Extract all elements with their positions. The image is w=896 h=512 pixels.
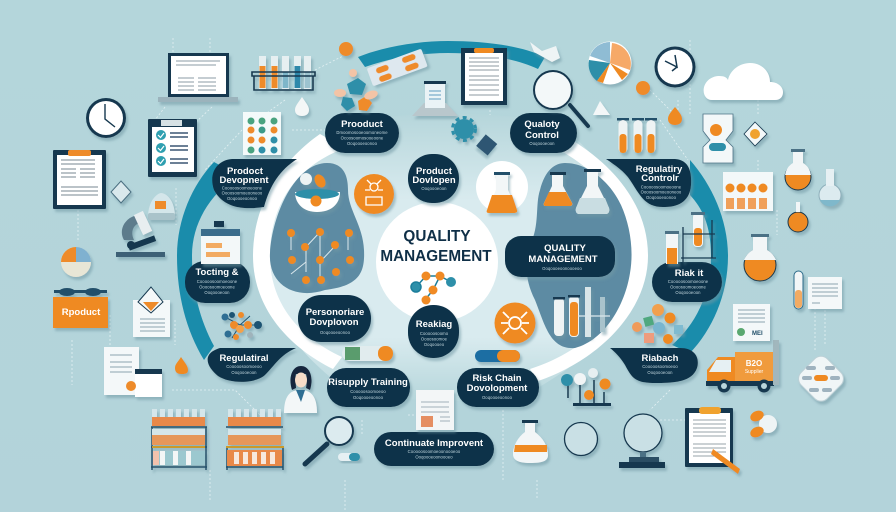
icon: document clipboard bbox=[53, 150, 106, 209]
pill: quality management: QUALITY bbox=[544, 243, 587, 254]
icon: flask bottom bbox=[513, 420, 548, 463]
icon: orange gear circle left bbox=[354, 174, 394, 214]
pill: testing bbox=[185, 261, 250, 303]
icon: truck: Supplier bbox=[745, 369, 764, 375]
icon: tubes in blob bbox=[553, 287, 610, 337]
teal arc: right bbox=[672, 160, 728, 353]
pill: regulatory: Regulatiry bbox=[636, 164, 683, 175]
pill: risk it: Oooosoomoeoone bbox=[670, 284, 706, 290]
pill: regulatrial: Ooqoooeoon bbox=[231, 370, 257, 375]
white ring: left crescent bbox=[253, 134, 345, 369]
icon: round flask right three bbox=[788, 202, 808, 232]
icon: checklist clipboard bbox=[148, 119, 197, 177]
pill: quality management: MANAGEMENT bbox=[528, 254, 598, 265]
pill: product development left: Cooooosoomoeoone bbox=[222, 186, 263, 190]
icon: pills right bbox=[749, 409, 777, 439]
icon: diamond badge bbox=[111, 181, 131, 203]
icon: orange drop right bbox=[668, 107, 682, 125]
icon: drop bbox=[295, 97, 309, 116]
pill: continuate improvent bbox=[374, 432, 494, 466]
pill: risk it: Riak it bbox=[675, 268, 704, 279]
pill: reakiag: Reakiag bbox=[416, 319, 452, 330]
pill: product development left: Devopnent bbox=[219, 175, 269, 186]
white ring: right crescent bbox=[530, 140, 648, 381]
icon: laptop bbox=[158, 53, 238, 102]
pill: product top: Prooduct bbox=[341, 119, 384, 130]
pill: regulatory bbox=[606, 159, 691, 207]
icon: big round flask bbox=[744, 234, 776, 281]
pill: testing: Ooqoooeoon bbox=[204, 290, 230, 295]
pill: personanitare: Ooqoooeoonoo bbox=[320, 330, 351, 335]
pill: continuate improvent: Cooooosoomoeoonoooeoo bbox=[408, 449, 461, 454]
icon: small orange badge bbox=[339, 42, 353, 56]
pill: riabach: Cooooosoomoeoo bbox=[642, 364, 678, 369]
pill: product center: Ooqoooeoon bbox=[421, 186, 447, 191]
pill: reakiag: Oooosoomoe bbox=[421, 336, 448, 342]
pill: risk it: Cooooosoomoeoone bbox=[668, 279, 709, 284]
pill: personanitare bbox=[298, 295, 371, 342]
title: QUALITY bbox=[403, 228, 471, 245]
pill: product top: Dmoomosooeoomoneome bbox=[336, 130, 388, 135]
icon: orange gear circle right bbox=[494, 302, 536, 344]
pill: regulatrial bbox=[208, 348, 296, 382]
pill: product development left: Prodoct bbox=[227, 166, 264, 177]
pill: product top: Ocoosoomosooeoone bbox=[341, 136, 384, 140]
pill: product top bbox=[325, 113, 399, 153]
pill: riabach: Ooqoooeoon bbox=[647, 370, 673, 375]
icon: flask in white circle bbox=[476, 161, 528, 213]
icon: orange drop bbox=[175, 357, 188, 374]
icon: blister pack bbox=[367, 49, 428, 86]
connector lines bbox=[72, 38, 825, 510]
pill: riabach: Riabach bbox=[642, 353, 679, 364]
pill: regulatory: Controlr bbox=[641, 173, 679, 184]
pill: quality control bbox=[510, 113, 577, 153]
icon: magnifier left bbox=[305, 417, 353, 464]
icon: document near truck: MEI bbox=[752, 331, 763, 337]
icon: document stack bbox=[104, 347, 162, 397]
pill: personanitare: Personoriare bbox=[306, 307, 364, 318]
icon: flask orange in blob bbox=[544, 172, 572, 206]
icon: document center bottom bbox=[416, 390, 454, 430]
icon: clock top bbox=[654, 46, 696, 88]
pill: risk it bbox=[652, 262, 722, 302]
icon: truck bbox=[706, 340, 779, 392]
icon: flask clear in blob bbox=[576, 169, 609, 214]
icon: bell flask bbox=[148, 193, 175, 220]
icon: small capsule bbox=[338, 453, 360, 461]
pill: reakiag: Ooqoooeo bbox=[424, 342, 445, 347]
icon: tubes with rack bbox=[665, 212, 716, 264]
pill: risk chain: Ooqoooeoonoo bbox=[482, 395, 513, 400]
pill: product development left: Oooosoomoeooneoo bbox=[222, 190, 263, 196]
pill: risupply training: Ooqoooeoonoo bbox=[353, 395, 384, 400]
icon: test tubes trio bbox=[617, 118, 657, 153]
pill: risk chain bbox=[457, 368, 539, 407]
teal arc: top bbox=[358, 41, 545, 69]
icon: microscope bbox=[116, 211, 165, 257]
pill: product center: Dovlopen bbox=[412, 175, 456, 186]
icon: clock left bbox=[86, 98, 126, 138]
icon: round flask right two bbox=[819, 169, 841, 206]
icon: capsule upper bbox=[342, 346, 393, 361]
pill: riabach bbox=[610, 348, 698, 383]
icon: pill cluster bbox=[334, 69, 379, 111]
icon: product box bbox=[53, 288, 108, 328]
icon: diamond badge right bbox=[744, 122, 767, 146]
icon: truck: B2O bbox=[746, 359, 762, 368]
pill: regulatory: Ooqoooeoonoo bbox=[646, 195, 677, 200]
icon: scientist bbox=[284, 366, 317, 413]
pill: quality control: Ooqoooeoon bbox=[529, 141, 555, 146]
pill: quality control: Control bbox=[525, 130, 559, 141]
icon: airplane bbox=[530, 42, 560, 62]
pill: risk chain: Dovolopment bbox=[467, 383, 528, 394]
pill: regulatrial: Regulatiral bbox=[219, 353, 269, 364]
icon: gear bbox=[452, 118, 476, 140]
title: MANAGEMENT bbox=[380, 248, 492, 265]
pill: regulatrial: Cooooosoomoeoo bbox=[226, 364, 262, 369]
pill: product development left: Ooqoooeoonoo bbox=[227, 196, 258, 201]
pill: risupply training bbox=[327, 368, 410, 407]
teal arc: left bbox=[177, 162, 238, 360]
icon: document with diamond bbox=[133, 287, 170, 337]
pill: testing: Cooooosoomoeoone bbox=[197, 279, 238, 284]
icon: small cube bbox=[476, 134, 497, 156]
icon: tube and document bbox=[794, 271, 842, 309]
center molecule bbox=[411, 272, 456, 304]
pill: continuate improvent: Continuate Improvent bbox=[385, 438, 484, 449]
icon: magnifier stand bbox=[619, 414, 665, 468]
icon: magnifier top bbox=[534, 71, 588, 126]
icon: document near truck bbox=[733, 304, 770, 341]
icon: small orange badge right bbox=[636, 81, 650, 95]
icon: balls on stand bbox=[561, 368, 611, 406]
icon: small pie bbox=[61, 247, 91, 277]
icon: pie top bbox=[588, 42, 632, 84]
icon: shelf two bbox=[226, 413, 284, 470]
right blue blob bbox=[527, 163, 632, 348]
pill: product top: Ooqoooeoonoo bbox=[347, 141, 378, 146]
icon: clipboard with pen bbox=[685, 407, 740, 474]
pill: product center: Product bbox=[416, 166, 453, 177]
icon: cloud bbox=[704, 63, 783, 100]
pill: product development left bbox=[212, 159, 297, 208]
icon: bowl bbox=[295, 172, 340, 212]
icon: colour dot grid bbox=[243, 112, 281, 155]
icon: product box: Rpoduct bbox=[62, 307, 101, 318]
inner pale disc bbox=[265, 114, 635, 401]
pill: testing: Tocting & bbox=[195, 267, 239, 278]
pill: regulatory: Oooosoomoeooneoo bbox=[641, 190, 682, 194]
pill: continuate improvent: Ooqoooeoonoooeo bbox=[415, 454, 453, 460]
center white circle bbox=[376, 202, 498, 322]
left blue blob bbox=[270, 163, 364, 293]
pill: quality management bbox=[505, 236, 615, 277]
pill: quality management: Ooqoooeoonoooeoo bbox=[542, 266, 582, 271]
icon: lens bbox=[564, 422, 598, 456]
pill: reakiag bbox=[408, 305, 459, 358]
title bbox=[380, 228, 492, 265]
icon: capsule right bbox=[475, 350, 520, 362]
pill: testing: Oooosoomoeoone bbox=[199, 284, 235, 290]
icon: round flask right one bbox=[785, 149, 811, 190]
pill: quality control: Qualoty bbox=[524, 119, 560, 130]
pill: reakiag: Cooooosoomo bbox=[420, 331, 449, 336]
icon: coloured blocks bbox=[632, 304, 683, 344]
pill: risk it: Ooqoooeoon bbox=[675, 290, 701, 295]
pill: risupply training: Risupply Training bbox=[328, 377, 408, 388]
icon: molecule in blob bbox=[287, 228, 354, 284]
icon: document tag bbox=[412, 81, 458, 116]
icon: test tube rack top bbox=[252, 56, 315, 90]
pill: regulatory: Cooooosoomoeoone bbox=[641, 184, 682, 190]
icon: grid card bbox=[723, 172, 773, 211]
icon: molecule lower left bbox=[222, 312, 262, 340]
pill: personanitare: Dovplovon bbox=[309, 317, 359, 328]
pill: risk chain: Risk Chain bbox=[472, 373, 522, 384]
pill: risupply training: Cooooosoomoeoo bbox=[350, 389, 386, 394]
icon: white triangle bbox=[593, 101, 610, 115]
icon: blister diamond bbox=[795, 353, 847, 405]
icon: clipboard top bbox=[461, 48, 507, 105]
icon: report machine bbox=[201, 221, 240, 264]
pill: product center bbox=[408, 154, 459, 203]
icon: device card bbox=[703, 114, 733, 163]
icon: shelf one bbox=[151, 413, 207, 470]
